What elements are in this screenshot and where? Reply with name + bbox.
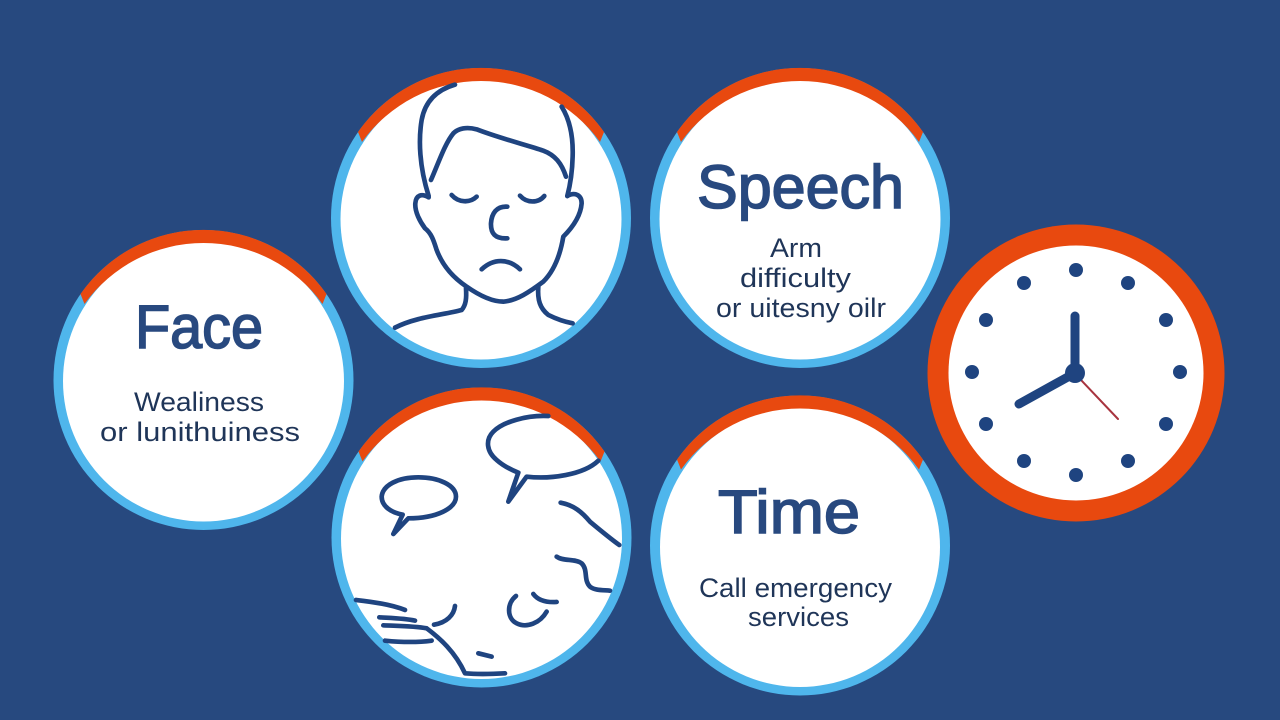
icon: sad face with closed eyes [395,85,582,328]
panel: time text [650,395,950,696]
icon: clock [928,224,1224,522]
text: call emergency: Call emergency [699,573,893,603]
heading: Time: Time [718,478,860,546]
text: services: services [748,602,849,632]
text: third line: or uitesny oilr [716,293,886,323]
heading: Speech: Speech [697,153,904,221]
text: difficulty: difficulty [740,263,852,293]
clock hands [1019,316,1118,419]
text: arm: Arm [770,233,822,263]
panel: speech text [650,68,950,368]
panel: speech bubbles illustration [332,387,632,688]
heading: Face: Face [135,293,263,361]
panel: face text [54,230,354,530]
text: weakness line 2: or lunithuiness [100,417,300,447]
clock hour dots [965,263,1187,482]
icon: speech bubbles and slurred lines [356,416,619,674]
text: weakness line 1: Wealiness [134,387,264,417]
panel: face illustration [331,68,631,368]
